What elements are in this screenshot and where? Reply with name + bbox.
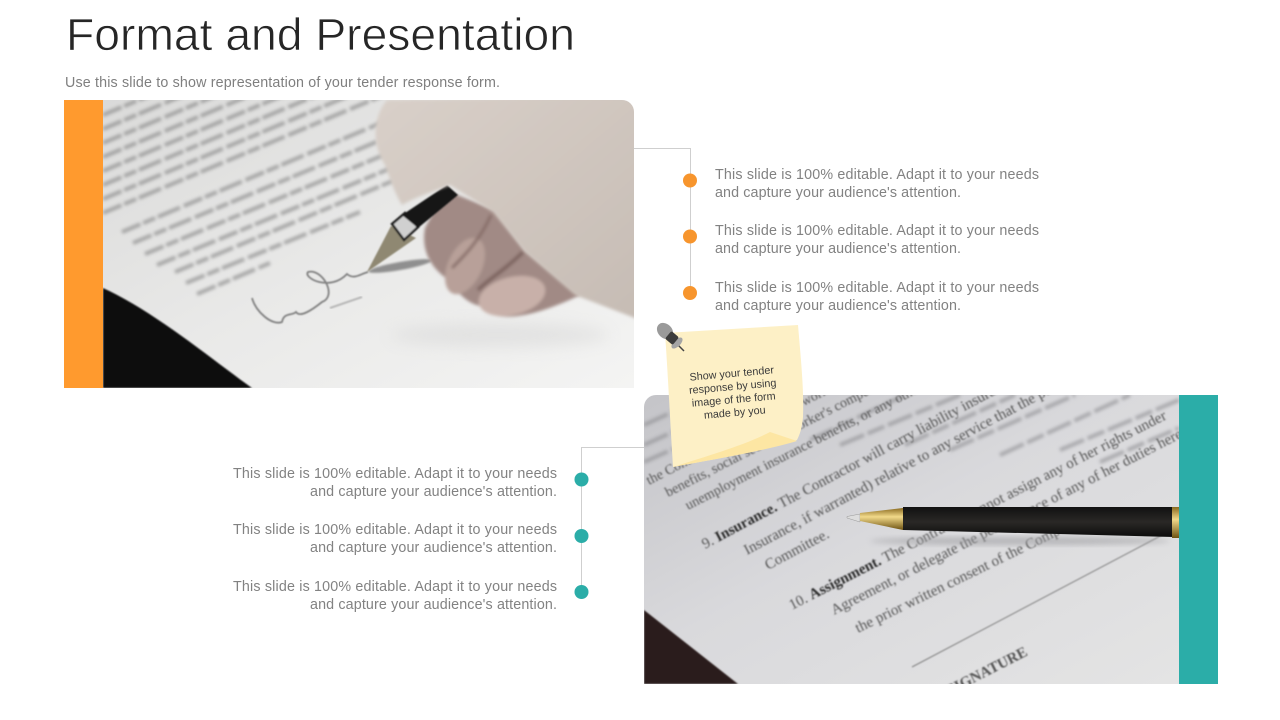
teal accent bar [1179, 395, 1218, 684]
note text: image of the form [691, 390, 776, 410]
bullet 2: and capture your audience's attention. [310, 540, 557, 556]
photo: pen on a contract: SIGNATURE [945, 644, 1030, 699]
bullet 3: This slide is 100% editable. Adapt it to your needs [233, 579, 557, 595]
note text: response by using [689, 377, 777, 397]
bullet 3: and capture your audience's attention. [715, 298, 961, 314]
note text [689, 364, 777, 422]
bullet 2: This slide is 100% editable. Adapt it to your needs [715, 223, 1039, 239]
bullet 3: and capture your audience's attention. [310, 597, 557, 613]
pen [367, 185, 458, 272]
title: Format and Presentation [66, 9, 575, 60]
note text: made by you [703, 404, 766, 422]
subtitle: Use this slide to show representation of your tender response form. [65, 75, 500, 91]
list: bottom bullet points [233, 466, 588, 613]
orange accent bar [64, 100, 103, 388]
connector: bottom list [582, 448, 644, 592]
connector: top list [634, 148, 690, 293]
photo: pen on a contract: Insurance, if warranted) relative to any service that the performance of [741, 346, 1123, 559]
hand [375, 96, 640, 320]
bullet 3: This slide is 100% editable. Adapt it to your needs [715, 280, 1039, 296]
sticky note callout [654, 320, 803, 467]
bullet 1: This slide is 100% editable. Adapt it to your needs [233, 466, 557, 482]
bullet 3 [683, 280, 1039, 314]
panel: signing photo [64, 100, 634, 388]
panel: document and pen photo [644, 395, 1218, 684]
note paper [665, 325, 803, 467]
photo: pen on a contract: the prior written consent of the Company. [853, 513, 1085, 637]
note curl [673, 432, 797, 467]
bullet 1 [233, 466, 588, 500]
photo: pen on a contract: unemployment insurance benefits, or any other insurance for the [683, 336, 1012, 514]
bullet 2: This slide is 100% editable. Adapt it to your needs [233, 522, 557, 538]
photo: pen on a contract: Agreement, or delegate the performance of any of her duties hereunder [829, 411, 1215, 619]
photo: pen on a contract: Committee. [762, 526, 832, 574]
photo: pen on a contract: the Contractor, social security, worker's compensation, insurance [644, 310, 974, 489]
fingers [424, 190, 580, 323]
photo: pen on a contract: benefits, social security, worker's compensation, or liability [663, 336, 966, 501]
bullet 2 [233, 522, 588, 556]
bullet 1: and capture your audience's attention. [310, 484, 557, 500]
bullet 3 [233, 579, 588, 613]
bullet 1: This slide is 100% editable. Adapt it to your needs [715, 167, 1039, 183]
pen [847, 507, 1179, 545]
bullet 2 [683, 223, 1039, 257]
bullet 2: and capture your audience's attention. [715, 241, 961, 257]
signature [252, 272, 368, 323]
bullet 1 [683, 167, 1039, 201]
photo: pen on a contract [644, 395, 1179, 684]
bullet 1: and capture your audience's attention. [715, 185, 961, 201]
photo: pen on a contract: 10. Assignment. The Contractor cannot assign any of her rights under [787, 408, 1169, 614]
icon: push pin [654, 320, 684, 351]
photo: pen on a contract: 9. Insurance. The Contractor will carry liability insurance coverage [699, 346, 1068, 553]
list: top bullet points [683, 167, 1039, 314]
photo: hand signing a document [103, 100, 634, 388]
note text: Show your tender [689, 364, 775, 384]
